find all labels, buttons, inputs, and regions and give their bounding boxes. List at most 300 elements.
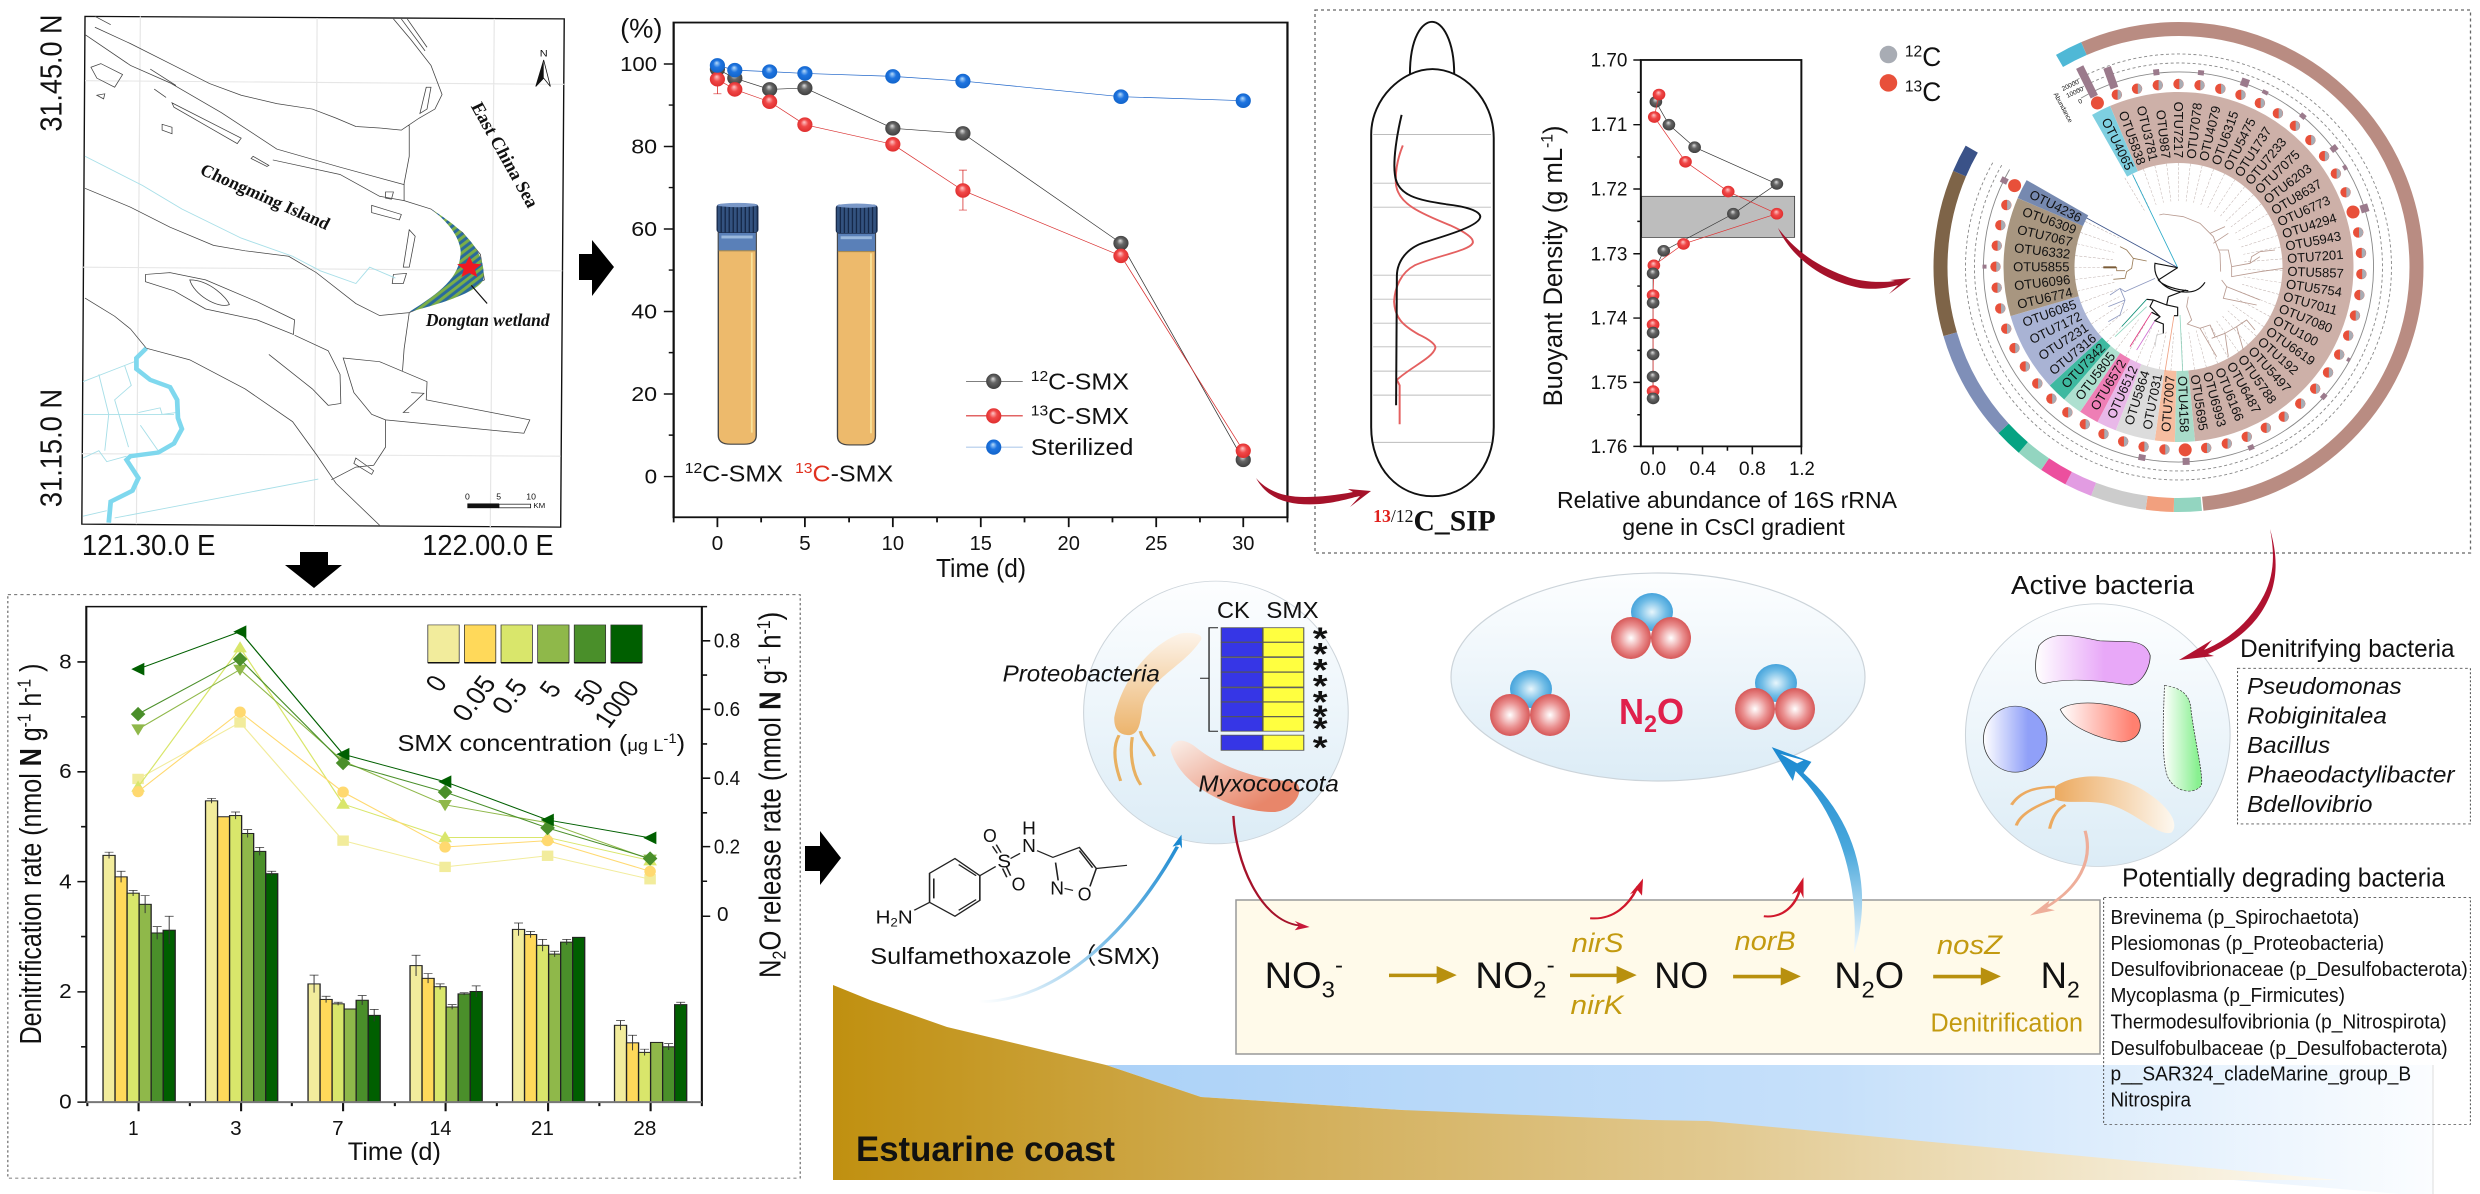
molecule atoms: O xyxy=(983,826,997,846)
arrow: chart to SIP tube xyxy=(1256,478,1371,507)
dinitrogen: N xyxy=(2041,956,2076,996)
degrading list box: Mycoplasma (p_Firmicutes) xyxy=(2110,984,2345,1006)
leader gap wedge xyxy=(2086,175,2178,267)
N2O molecule right xyxy=(1735,664,1815,730)
tube labels: C xyxy=(812,460,831,487)
right axis numbers: 0.8 xyxy=(714,630,740,652)
tube labels: 12 xyxy=(685,460,702,476)
degrading list box: Brevinema (p_Spirochaetota) xyxy=(2110,906,2359,928)
molecule atoms: O xyxy=(1012,874,1025,895)
OTU labels: OTU6203 xyxy=(2261,161,2315,207)
plot axes xyxy=(664,23,1287,527)
heatmap headers xyxy=(1217,597,1319,623)
series: 13C xyxy=(1647,89,1783,404)
left axis numbers: 8 xyxy=(59,650,72,673)
series: 0 xyxy=(132,717,656,884)
x axis labels: 14 xyxy=(429,1117,451,1139)
axis numbers: 1.72 xyxy=(1591,179,1627,200)
label: denitrification: Denitrification xyxy=(1931,1010,2083,1038)
chart: SMX degradation over time xyxy=(620,14,1287,554)
heatmap xyxy=(1221,628,1304,750)
molecule atoms: O xyxy=(1078,884,1092,905)
y axis title: Buoyant Density (g mL xyxy=(1539,156,1568,406)
OTU labels: OTU7007 xyxy=(2158,375,2178,432)
series: 5 xyxy=(131,665,657,866)
abundance axis labels: 20000 xyxy=(2061,79,2081,93)
cell blue xyxy=(1983,706,2047,772)
arrow: NO2 to NO xyxy=(1570,966,1637,984)
OTU labels: OTU7078 xyxy=(2184,102,2205,160)
molecule atoms: N xyxy=(898,907,913,928)
legend: SMX concentration colours: 0 xyxy=(417,672,455,695)
y axis ticks: 20 xyxy=(631,382,657,405)
latitude labels: 31.45.0 N xyxy=(34,15,69,132)
OTU labels: OTU7080 xyxy=(2277,301,2335,336)
left axis title: Denitrification rate (nmol N g xyxy=(14,729,48,1044)
x axis title: gene in CsCl gradient xyxy=(1622,515,1845,541)
legend: isotope dots: 13 xyxy=(1905,78,1922,95)
molecule structure xyxy=(914,845,1127,916)
arrow: map to rate chart xyxy=(285,552,342,588)
longitude labels xyxy=(82,529,554,562)
13C density curve xyxy=(1394,145,1473,424)
degrading list box: Plesiomonas (p_Proteobacteria) xyxy=(2110,932,2384,954)
nitrite: - xyxy=(1547,952,1555,978)
OTU labels: OTU5497 xyxy=(2245,343,2294,395)
molecule atoms: H xyxy=(876,907,893,928)
OTU labels: OTU5838 xyxy=(2116,109,2149,167)
legend: SMX concentration colours: 50 xyxy=(566,676,611,709)
series: 12C-SMX xyxy=(710,62,1251,467)
OTU labels: OTU6166 xyxy=(2212,365,2247,423)
left axis title: -1 xyxy=(13,714,35,727)
arrow: density chart to tree xyxy=(1778,228,1911,294)
x axis ticks: 30 xyxy=(1232,531,1254,554)
OTU labels: OTU6309 xyxy=(2020,204,2078,237)
series: 12C xyxy=(1650,96,1783,398)
arrow: N2O to N2 xyxy=(1933,967,2001,986)
legend: C-SMX xyxy=(1048,403,1129,430)
small arrow from norB step xyxy=(1764,877,1803,916)
taxon labels: Myxococcota xyxy=(1198,770,1339,797)
OTU labels: OTU987 xyxy=(2153,109,2174,160)
series: 1000 xyxy=(131,625,656,844)
left axis title: h xyxy=(14,693,48,714)
N2O label: O xyxy=(1657,691,1684,732)
axis numbers: 1.74 xyxy=(1591,308,1627,329)
OTU labels: OTU5805 xyxy=(2072,349,2118,403)
arrow: map to degradation chart xyxy=(579,240,614,296)
cell green xyxy=(2163,685,2202,791)
heading: active bacteria: Active bacteria xyxy=(2011,572,2194,600)
significance stars: * xyxy=(1313,653,1328,687)
tube labels xyxy=(685,460,893,487)
series: 0.5 xyxy=(131,641,657,865)
north arrow xyxy=(536,49,550,87)
bars: day 21 xyxy=(513,929,585,1102)
legend: isotope dots: 12 xyxy=(1905,43,1922,61)
OTU labels: OTU4158 xyxy=(2175,376,2192,433)
x axis labels: 3 xyxy=(230,1117,242,1139)
OTU labels: OTU5754 xyxy=(2285,276,2343,300)
N2O molecule left xyxy=(1490,670,1570,736)
right axis numbers: 0.4 xyxy=(714,767,740,789)
significance stars: * xyxy=(1313,621,1328,656)
right axis title: ) xyxy=(753,612,787,620)
cell red xyxy=(2060,703,2140,742)
x axis labels: 21 xyxy=(531,1117,554,1139)
small arrow from nitrite step xyxy=(1590,878,1643,918)
legend: SMX concentration colours: ) xyxy=(677,731,685,756)
x axis ticks: 20 xyxy=(1058,531,1080,554)
OTU labels: OTU6512 xyxy=(2104,363,2141,421)
left axis title: ) xyxy=(14,664,48,679)
arrow: active bacteria to denitrification xyxy=(2030,831,2087,915)
abundance axis labels: 0 xyxy=(2077,98,2084,106)
panel: rate chart xyxy=(8,595,800,1178)
legend: SMX concentration colours xyxy=(397,625,685,756)
OTU labels: OTU6085 xyxy=(2020,297,2078,330)
gene: nirK: nirK xyxy=(1571,989,1625,1020)
SIP label: /12 xyxy=(1391,507,1414,526)
series: 0.05 xyxy=(132,707,656,877)
bars: day 14 xyxy=(410,966,482,1102)
nitrous oxide: 2 xyxy=(1861,976,1875,1003)
OTU labels: OTU3781 xyxy=(2134,104,2161,163)
OTU labels: OTU5855 xyxy=(2013,259,2070,274)
significance stars: * xyxy=(1313,699,1328,734)
series: sterilized xyxy=(710,58,1251,108)
OTU labels: OTU5788 xyxy=(2235,352,2280,407)
y axis ticks: 60 xyxy=(631,217,657,240)
taxon labels: Proteobacteria xyxy=(1003,660,1160,687)
dinitrogen: 2 xyxy=(2067,976,2080,1003)
OTU labels: OTU7316 xyxy=(2046,331,2099,378)
abundance axis labels: 10000 xyxy=(2065,86,2085,100)
chart: buoyant density xyxy=(1539,50,1898,541)
OTU labels: OTU6774 xyxy=(2016,284,2074,312)
x axis title: time: Time (d) xyxy=(936,553,1026,583)
x axis ticks: 5 xyxy=(799,531,811,554)
molecule atoms: N xyxy=(1050,878,1064,899)
tree branches xyxy=(2087,175,2283,372)
panel: study area map xyxy=(34,15,564,562)
significance stars: * xyxy=(1313,637,1328,672)
north arrow: N xyxy=(540,49,548,60)
legend: SMX concentration colours: -1 xyxy=(663,732,677,747)
y axis ticks: 0 xyxy=(645,465,657,488)
axis numbers: 0.8 xyxy=(1739,459,1766,480)
molecule atoms: 2 xyxy=(890,916,898,929)
OTU labels: OTU6619 xyxy=(2263,324,2318,368)
x axis labels: 1 xyxy=(128,1117,139,1139)
axis numbers: 1.76 xyxy=(1591,437,1627,458)
axes xyxy=(77,607,710,1111)
denitrification box xyxy=(1236,900,2100,1054)
axis numbers xyxy=(1591,50,1815,480)
right axis numbers xyxy=(714,630,740,925)
legend: SMX concentration colours: SMX concentration (μg L xyxy=(397,731,672,756)
tube labels: 13 xyxy=(795,460,812,476)
molecule atoms: H xyxy=(1022,819,1036,839)
axis numbers: 0.0 xyxy=(1640,459,1666,480)
Proteobacteria cell xyxy=(1114,633,1201,785)
dots ring xyxy=(1990,79,2367,457)
left axis numbers: 6 xyxy=(59,760,72,782)
tube labels: C-SMX xyxy=(702,460,783,487)
OTU labels: OTU6773 xyxy=(2275,193,2333,229)
OTU labels: OTU7172 xyxy=(2027,309,2084,347)
bubble: N2O xyxy=(1451,573,1865,781)
significance stars xyxy=(1313,621,1328,765)
axis numbers: 0.4 xyxy=(1689,459,1716,480)
cell purple xyxy=(2036,635,2150,685)
OTU labels: OTU4065 xyxy=(2099,115,2137,173)
legend: C-SMX xyxy=(1048,368,1129,395)
significance stars: * xyxy=(1313,730,1328,765)
x axis labels: 28 xyxy=(633,1117,656,1139)
longitude labels: 122.00.0 E xyxy=(422,529,554,562)
abundance axis labels: Abundance xyxy=(2052,92,2074,124)
denitrifying list box xyxy=(2238,668,2470,824)
nitrous oxide: O xyxy=(1875,956,1904,996)
chart: circular phylogenetic tree xyxy=(1842,0,2480,603)
x axis labels: 7 xyxy=(332,1117,344,1139)
OTU labels: OTU4294 xyxy=(2280,210,2338,241)
OTU labels: OTU6572 xyxy=(2087,357,2129,413)
abundance axis labels xyxy=(2052,79,2085,124)
nitrous oxide: N xyxy=(1834,956,1869,996)
gradient fraction lines xyxy=(1373,134,1491,442)
abundance rings xyxy=(1965,54,2391,480)
estuarine sea xyxy=(1106,1065,2433,1194)
test tubes xyxy=(717,203,877,445)
label: estuarine coast: Estuarine coast xyxy=(856,1130,1115,1169)
arrow: community to nitrate xyxy=(1233,816,1310,930)
right axis numbers: 0 xyxy=(717,903,729,925)
axis numbers: 1.75 xyxy=(1591,373,1627,394)
gene: nirS: nirS xyxy=(1572,927,1623,958)
x axis title xyxy=(1557,488,1898,541)
leader lines xyxy=(2065,153,2292,381)
red star: sampling site xyxy=(457,256,482,277)
arrow: rate chart to process diagram xyxy=(805,831,841,885)
significance stars: * xyxy=(1313,669,1328,703)
OTU labels: OTU5475 xyxy=(2220,116,2259,173)
molecule name: Sulfamethoxazole（SMX) xyxy=(870,943,1160,969)
coastlines xyxy=(85,16,530,525)
process diagram xyxy=(1003,581,1348,844)
scale bar xyxy=(465,492,545,510)
left axis numbers: 0 xyxy=(59,1091,72,1113)
tube outline xyxy=(1371,22,1494,496)
right axis title: N xyxy=(753,961,787,978)
map labels xyxy=(197,99,550,330)
bars: day 7 xyxy=(308,984,380,1102)
OTU labels: OTU4079 xyxy=(2196,104,2224,163)
denitrifying list box: Pseudomonas xyxy=(2247,673,2402,699)
right axis title: h xyxy=(753,634,787,656)
heatmap headers: CK xyxy=(1217,597,1250,623)
x axis ticks xyxy=(712,531,1254,554)
left axis title: -1 xyxy=(13,679,35,693)
nitrate: NO xyxy=(1265,956,1338,996)
x axis labels xyxy=(128,1117,656,1139)
scale bar: 5 xyxy=(496,492,501,501)
map labels: Chongming Island xyxy=(197,160,333,233)
OTU labels: OTU6332 xyxy=(2013,240,2071,262)
map frame xyxy=(82,16,564,527)
scale bar: KM xyxy=(533,501,545,510)
legend: SMX concentration colours: 5 xyxy=(531,678,569,701)
estuarine land wedge xyxy=(833,985,2338,1180)
dashed frame xyxy=(8,595,800,1178)
wetland hatched area xyxy=(409,209,484,312)
panel: stable isotope probing dashed frame xyxy=(1315,10,2470,553)
Myxococcota cell xyxy=(1170,741,1299,812)
right axis title: O release rate (nmol xyxy=(753,710,787,951)
tube labels: -SMX xyxy=(831,460,893,487)
significance stars: * xyxy=(1313,684,1328,719)
OTU labels: OTU7067 xyxy=(2016,222,2074,249)
axis numbers: 1.70 xyxy=(1591,50,1627,71)
arrow: tree to active bacteria xyxy=(2179,529,2276,660)
highlight band xyxy=(1642,196,1795,237)
scale bar: 10 xyxy=(526,492,536,501)
scale bar: 0 xyxy=(465,492,470,501)
denitrifying list box: Bacillus xyxy=(2247,732,2331,758)
legend: isotope dots: C xyxy=(1922,42,1941,72)
y axis ticks: 40 xyxy=(631,300,657,323)
OTU labels: OTU6096 xyxy=(2013,272,2071,293)
right axis numbers: 0.2 xyxy=(714,835,740,858)
legend: isotope dots: C xyxy=(1922,77,1941,107)
sulfamethoxazole molecule and steps xyxy=(870,816,1643,1020)
map labels: Dongtan wetland xyxy=(425,311,550,330)
OTU labels: OTU5864 xyxy=(2121,369,2153,427)
nitrate: - xyxy=(1335,952,1343,978)
OTU labels: OTU4236 xyxy=(2027,187,2084,225)
legend: SMX concentration colours: 1000 xyxy=(586,677,647,731)
y axis ticks: 80 xyxy=(631,135,657,158)
x axis ticks: 10 xyxy=(882,531,904,554)
N2O label: N xyxy=(1619,691,1644,732)
axis numbers: 1.71 xyxy=(1591,115,1627,136)
molecule atoms xyxy=(876,819,1092,929)
outer taxonomy ring xyxy=(1842,0,2480,603)
OTU labels: OTU192 xyxy=(2255,334,2302,378)
bars: day 3 xyxy=(206,801,278,1102)
OTU labels xyxy=(2013,102,2344,433)
OTU labels: OTU5857 xyxy=(2287,264,2344,281)
latitude labels xyxy=(34,15,69,507)
nitrite: 2 xyxy=(1533,976,1547,1003)
molecule atoms: N xyxy=(1022,836,1036,856)
arrow: SMX to bubble xyxy=(979,847,1177,1002)
OTU labels: OTU1737 xyxy=(2231,124,2275,180)
OTU labels: OTU6487 xyxy=(2224,359,2264,416)
axes xyxy=(1633,60,1801,454)
cell orange flagellated xyxy=(2012,776,2174,833)
OTU labels: OTU7201 xyxy=(2287,247,2344,266)
N2O molecule centre xyxy=(1611,593,1691,659)
arrow: NO to N2O xyxy=(1733,967,1801,986)
inner coloured sectors xyxy=(1981,70,2376,464)
right axis title: 2 xyxy=(769,951,790,959)
x axis title: Time (d) xyxy=(348,1139,441,1166)
legend: isotope dots xyxy=(1880,42,1941,107)
OTU labels: OTU6315 xyxy=(2208,109,2242,167)
OTU labels: OTU7011 xyxy=(2282,289,2339,318)
axis numbers: 1.2 xyxy=(1789,459,1815,480)
arrow to wetland xyxy=(471,285,487,304)
left axis numbers: 4 xyxy=(59,870,72,893)
significance stars: * xyxy=(1313,711,1328,746)
x axis ticks: 0 xyxy=(712,531,723,554)
nitrite: NO xyxy=(1475,956,1548,996)
legend xyxy=(966,368,1133,460)
legend: SMX concentration colours: 0.5 xyxy=(483,675,535,718)
SIP label: 13 xyxy=(1373,507,1391,526)
arrow: NO3 to NO2 xyxy=(1389,966,1457,984)
leader dash gaps xyxy=(2078,166,2279,368)
OTU labels: OTU7217 xyxy=(2171,102,2186,158)
heatmap headers: SMX xyxy=(1266,597,1319,623)
y axis title: ) xyxy=(1539,125,1568,134)
error bars xyxy=(105,798,685,1056)
denitrifying list box: Bdellovibrio xyxy=(2247,791,2372,817)
bubble: community shift xyxy=(1003,581,1348,844)
legend: 13 xyxy=(1031,403,1048,419)
gene: norB: norB xyxy=(1735,925,1796,956)
right axis title: N g xyxy=(753,672,787,710)
degrading list box xyxy=(2104,898,2470,1124)
OTU labels: OTU5695 xyxy=(2188,374,2211,432)
series: 50 xyxy=(131,652,657,866)
heatmap bracket xyxy=(1200,628,1218,731)
OTU labels: OTU7342 xyxy=(2058,340,2108,391)
degrading list box: Nitrospira xyxy=(2110,1089,2192,1111)
SIP label: C_SIP xyxy=(1414,505,1496,537)
percent unit: (%) xyxy=(620,14,662,44)
bars: day 28 xyxy=(615,1005,687,1102)
axis numbers: 1.73 xyxy=(1591,244,1627,265)
bars: day 1 xyxy=(103,855,175,1102)
gene: nosZ: nosZ xyxy=(1937,929,2003,960)
right process elements xyxy=(1654,572,2470,1124)
denitrifying list box: Robiginitalea xyxy=(2247,702,2387,729)
legend: 12 xyxy=(1031,368,1048,385)
y axis title: -1 xyxy=(1539,134,1557,148)
molecule atoms: S xyxy=(997,852,1011,872)
graticule xyxy=(82,16,564,527)
longitude labels: 121.30.0 E xyxy=(82,529,215,562)
y axis ticks: 100 xyxy=(620,52,657,75)
OTU labels: OTU7233 xyxy=(2242,135,2289,188)
series: 13C-SMX xyxy=(710,72,1251,458)
OTU labels: OTU100 xyxy=(2271,313,2321,349)
left axis numbers xyxy=(59,650,72,1113)
taxon labels xyxy=(1003,660,1339,797)
nitric oxide: NO xyxy=(1654,956,1708,996)
right axis numbers: 0.6 xyxy=(714,698,740,720)
OTU labels: OTU8637 xyxy=(2268,176,2325,218)
rivers xyxy=(83,156,395,518)
OTU labels: OTU6993 xyxy=(2200,370,2229,428)
panel: SIP centrifuge tube xyxy=(1371,22,1496,537)
abundance bars xyxy=(1982,65,2369,465)
right axis title: -1 xyxy=(753,620,774,634)
